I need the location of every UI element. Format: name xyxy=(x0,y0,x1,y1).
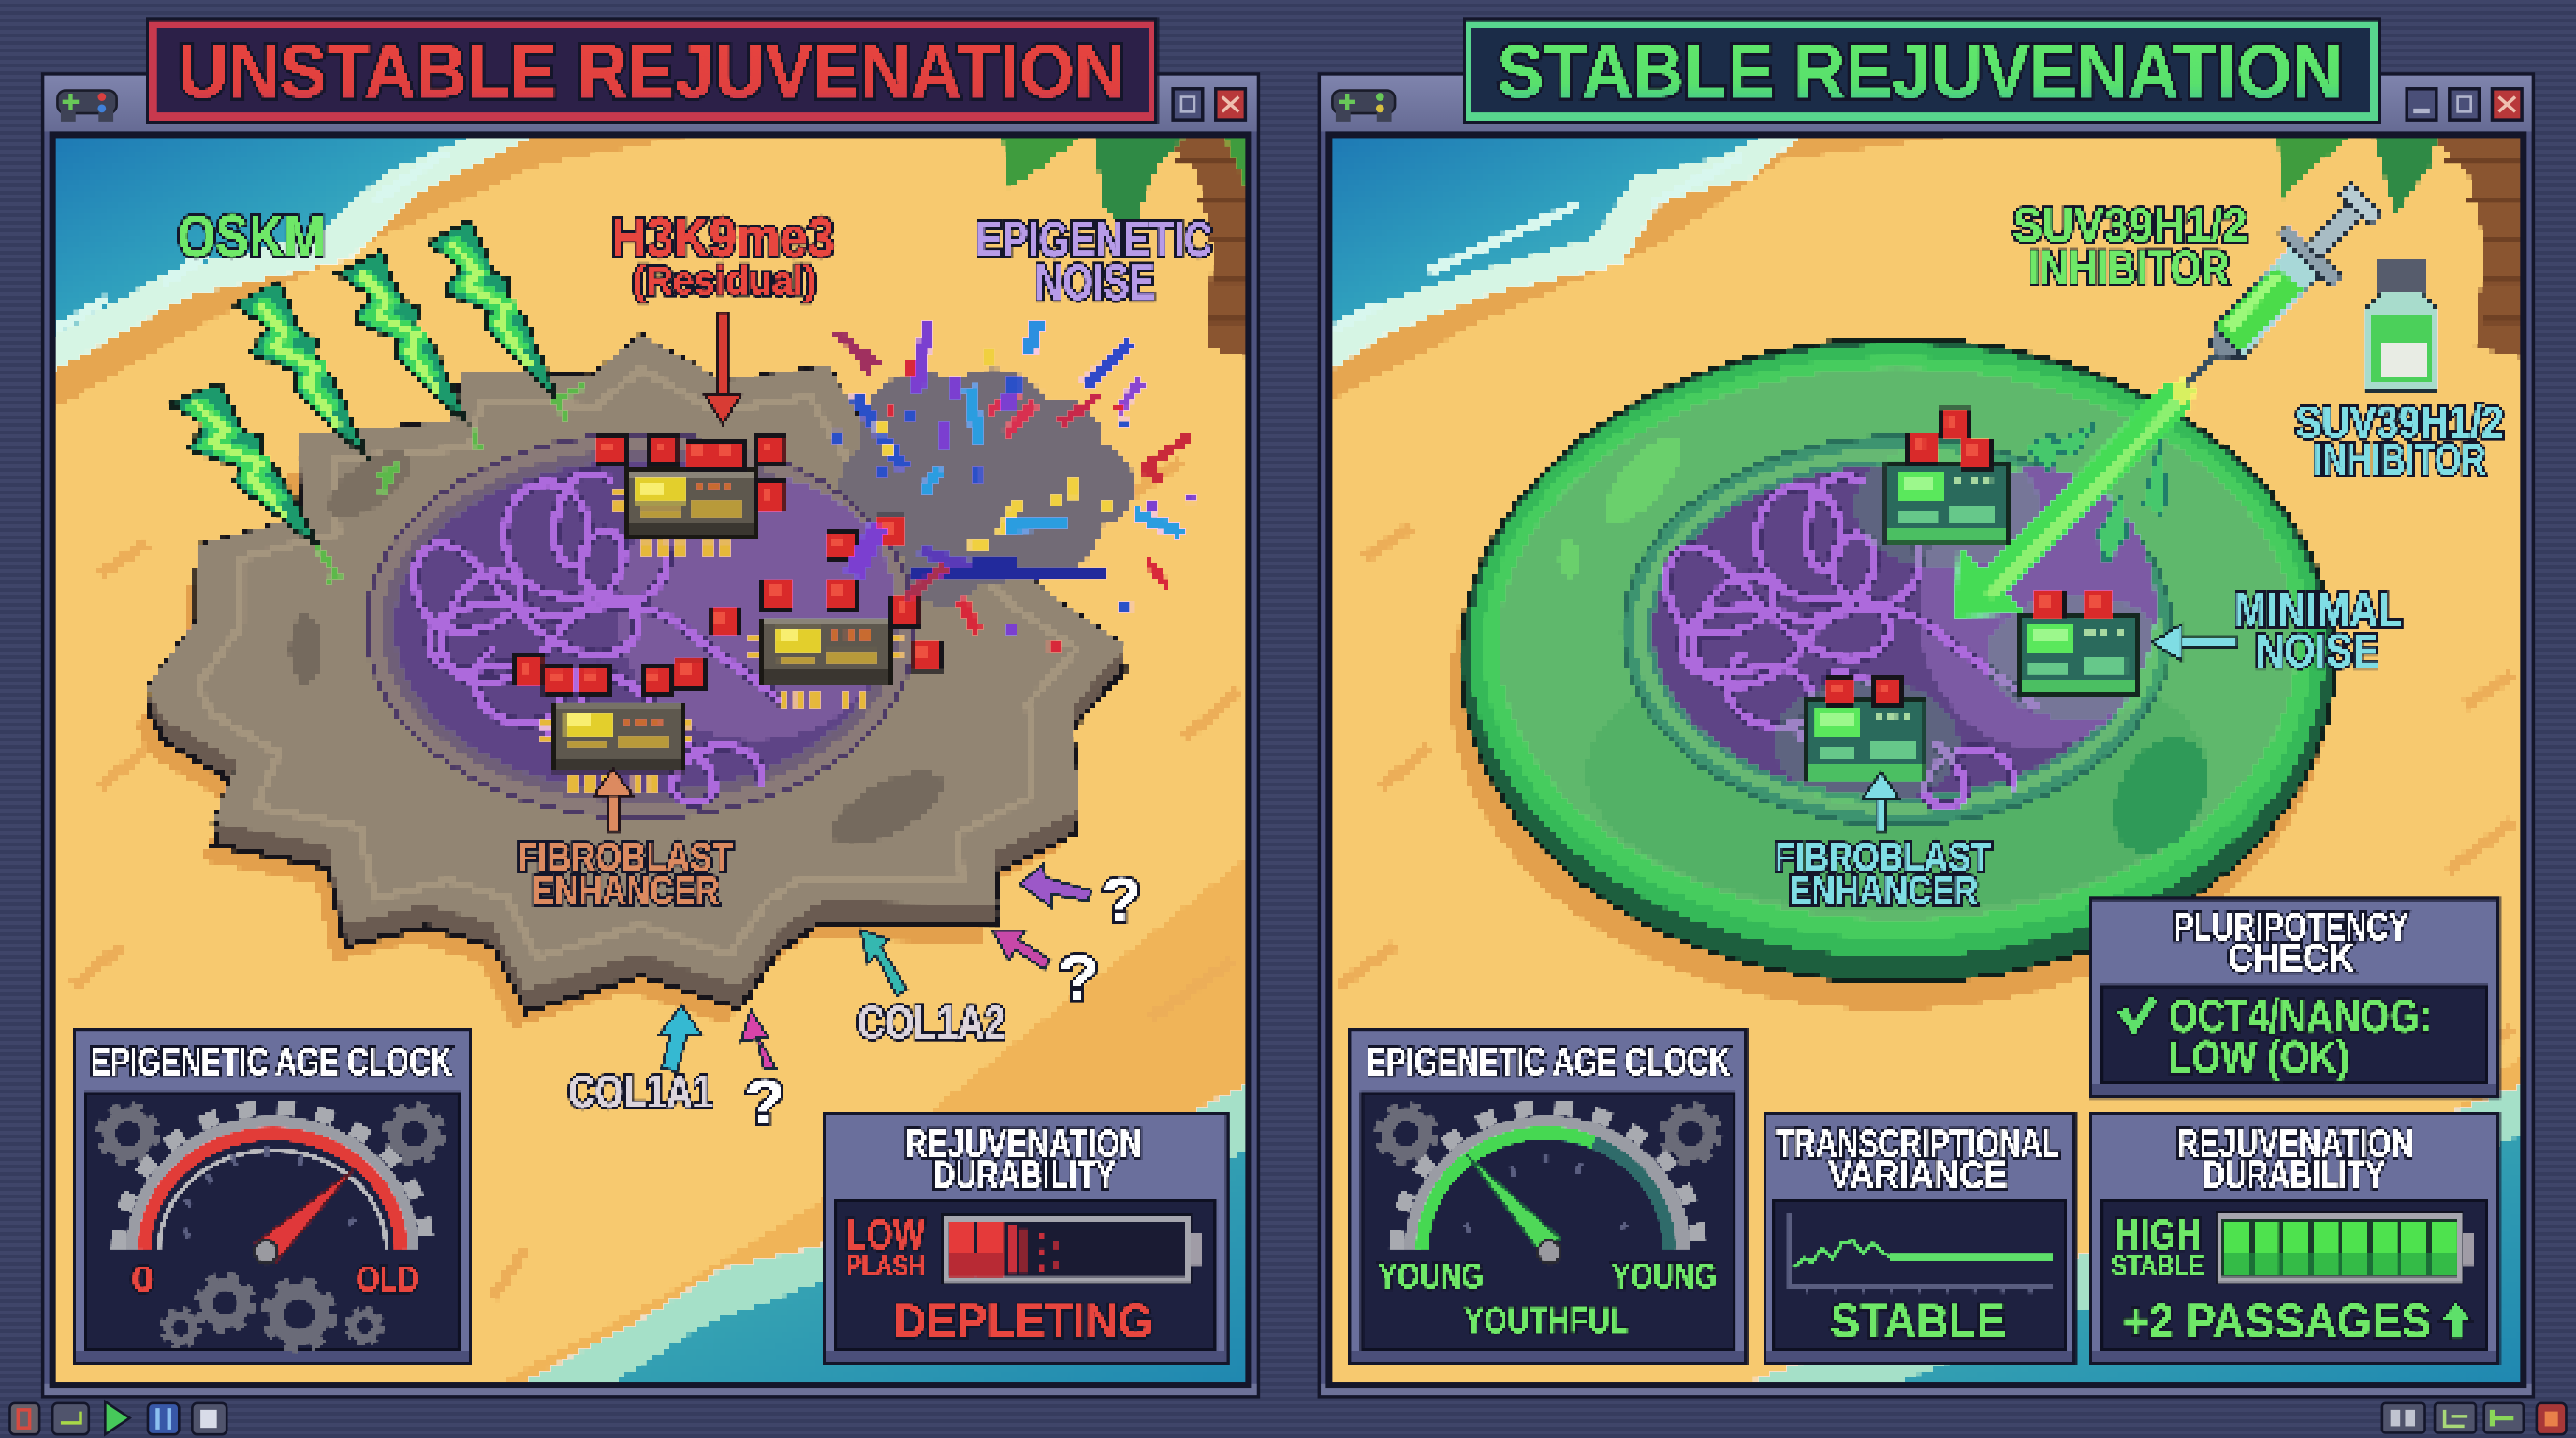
gauge label: young left: YOUNG xyxy=(1379,1256,1484,1297)
label: minimal: MINIMAL xyxy=(2234,583,2402,637)
status: plash: PLASH xyxy=(846,1251,925,1282)
label: OSKM: OSKM xyxy=(178,204,326,270)
panel: transcriptional variance xyxy=(1763,1112,2076,1365)
nucleus xyxy=(366,433,915,818)
status: high: HIGH xyxy=(2115,1211,2202,1258)
icon: gamepad right xyxy=(1332,91,1395,122)
label: fibroblast: FIBROBLAST xyxy=(518,835,733,880)
repair chips xyxy=(1775,444,2170,805)
arrow: COL1A2 xyxy=(861,930,907,996)
cell shadow xyxy=(1449,370,2330,1010)
status: depleting: DEPLETING xyxy=(894,1295,1153,1348)
panel: epigenetic clock left xyxy=(72,1029,472,1365)
title: stable rejuvenation: STABLE REJUVENATION xyxy=(1497,30,2343,114)
lightning bolts: OSKM xyxy=(168,220,583,583)
battery full xyxy=(2217,1212,2474,1284)
label: noise: NOISE xyxy=(2256,624,2378,678)
label: epigenetic: EPIGENETIC xyxy=(976,213,1212,268)
panel: rejuvenation durability left xyxy=(823,1112,1229,1365)
scattered small green arrows xyxy=(2027,424,2167,564)
window frame: left xyxy=(41,72,1260,1399)
label: question mark 1: ? xyxy=(744,1068,785,1137)
gauge label: young right: YOUNG xyxy=(1612,1256,1717,1297)
taskbar icons: right xyxy=(2382,1403,2566,1434)
label: inhibitor top: INHIBITOR xyxy=(2029,242,2230,295)
heading line 2: DURABILITY xyxy=(933,1153,1116,1196)
syringe xyxy=(2159,172,2393,411)
arrow: H3K9me3 xyxy=(705,312,741,424)
scene: right beach with healthy cell xyxy=(1329,135,2524,1386)
gauge xyxy=(101,1107,441,1346)
left annotations xyxy=(178,204,1212,1137)
chips xyxy=(540,469,902,792)
result: passages: +2 PASSAGES xyxy=(2123,1295,2432,1348)
panel: rejuvenation durability right xyxy=(2089,1112,2500,1365)
label: enhancer: ENHANCER xyxy=(533,868,720,913)
noise cloud xyxy=(838,368,1135,607)
window frame: right xyxy=(1318,72,2535,1399)
result line 1: OCT4/NANOG: xyxy=(2169,991,2432,1042)
gauge label: 0: 0 xyxy=(131,1260,154,1300)
label: question mark 3: ? xyxy=(1101,867,1142,936)
label: residual: (Residual) xyxy=(633,258,816,302)
gauge label: youthful: YOUTHFUL xyxy=(1464,1300,1628,1341)
inhibitor beam arrow xyxy=(1956,379,2195,616)
epigenetic noise confetti xyxy=(829,320,1194,653)
status: stable: STABLE xyxy=(2111,1251,2204,1282)
cell top surface xyxy=(148,335,1125,990)
label: COL1A2: COL1A2 xyxy=(857,998,1005,1049)
palm tree xyxy=(2277,135,2524,359)
label: SUV39H1/2 vial: SUV39H1/2 xyxy=(2295,398,2504,448)
heading line 1: REJUVENATION xyxy=(2177,1123,2413,1166)
heading line 2: VARIANCE xyxy=(1828,1153,2008,1196)
status: low: LOW xyxy=(846,1211,926,1258)
line chart xyxy=(1789,1214,2054,1293)
up arrow xyxy=(2439,1301,2472,1339)
cell shadow xyxy=(136,473,1061,1028)
label: COL1A1: COL1A1 xyxy=(568,1067,713,1118)
palm tree xyxy=(1003,135,1249,359)
nucleus xyxy=(1623,437,2172,825)
check mark xyxy=(2116,994,2159,1036)
window controls: left xyxy=(1173,89,1245,120)
label: SUV39H1/2 top: SUV39H1/2 xyxy=(2012,198,2247,252)
cell side wall xyxy=(148,335,1125,1012)
residual marks xyxy=(1823,407,2115,708)
arrow: unknown 1 xyxy=(741,1010,775,1068)
icon: gamepad left xyxy=(57,91,117,122)
arrow: fibroblast enhancer xyxy=(594,769,633,831)
label: question mark 2: ? xyxy=(1058,944,1099,1013)
heading line 1: REJUVENATION xyxy=(905,1123,1142,1166)
label: fibroblast: FIBROBLAST xyxy=(1775,835,1991,880)
gauge label: OLD: OLD xyxy=(357,1260,419,1300)
right annotations xyxy=(1775,198,2504,913)
gauge xyxy=(1380,1107,1718,1264)
heading line 2: DURABILITY xyxy=(2203,1153,2385,1196)
heading line 1: TRANSCRIPTIONAL xyxy=(1776,1123,2060,1166)
arrow: unknown 2 xyxy=(992,930,1050,970)
vial xyxy=(2364,259,2438,391)
title: unstable rejuvenation: UNSTABLE REJUVENATION xyxy=(178,30,1125,114)
status: stable: STABLE xyxy=(1830,1295,2006,1348)
scene: left beach with damaged cell xyxy=(52,135,1249,1386)
arrow: minimal noise xyxy=(2152,624,2237,661)
panel: pluripotency check xyxy=(2089,897,2500,1099)
arrow: fibroblast enhancer xyxy=(1863,772,1899,831)
heading: EPIGENETIC AGE CLOCK xyxy=(91,1039,452,1083)
heading line 1: PLURIPOTENCY xyxy=(2174,905,2408,948)
panel: epigenetic clock right xyxy=(1349,1029,1748,1365)
arrow: unknown 3 xyxy=(1020,864,1090,907)
battery low xyxy=(942,1214,1203,1284)
H3K9me3 red marks xyxy=(513,433,943,697)
label: noise: NOISE xyxy=(1035,255,1155,310)
label: H3K9me3: H3K9me3 xyxy=(611,206,835,269)
heading line 2: CHECK xyxy=(2228,936,2354,979)
arrow: COL1A1 xyxy=(659,1005,701,1071)
label: inhibitor vial: INHIBITOR xyxy=(2313,435,2485,485)
label: enhancer: ENHANCER xyxy=(1789,868,1978,913)
heading: EPIGENETIC AGE CLOCK xyxy=(1367,1039,1731,1083)
result line 2: LOW (OK) xyxy=(2169,1033,2349,1083)
window controls: right xyxy=(2407,89,2522,120)
taskbar icons: left xyxy=(10,1401,227,1434)
green cell body xyxy=(1460,339,2334,983)
